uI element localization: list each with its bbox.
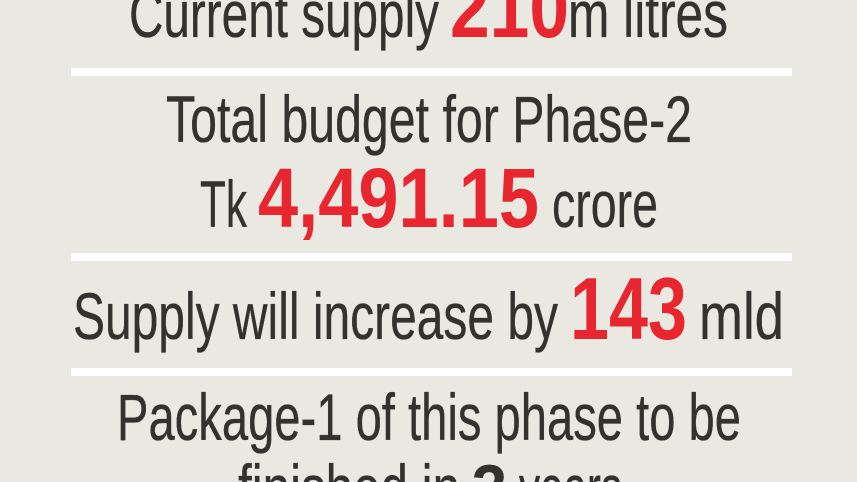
text: total budget amount: crore [552, 167, 658, 241]
text: supply increase: Supply will increase by [73, 279, 558, 353]
text: total budget amount: Tk [200, 167, 248, 241]
text: supply increase: mld [699, 279, 784, 353]
text: supply increase: 143 [570, 259, 687, 358]
text: total budget amount: 4,491.15 [258, 151, 539, 245]
text: current supply [129, 0, 728, 55]
